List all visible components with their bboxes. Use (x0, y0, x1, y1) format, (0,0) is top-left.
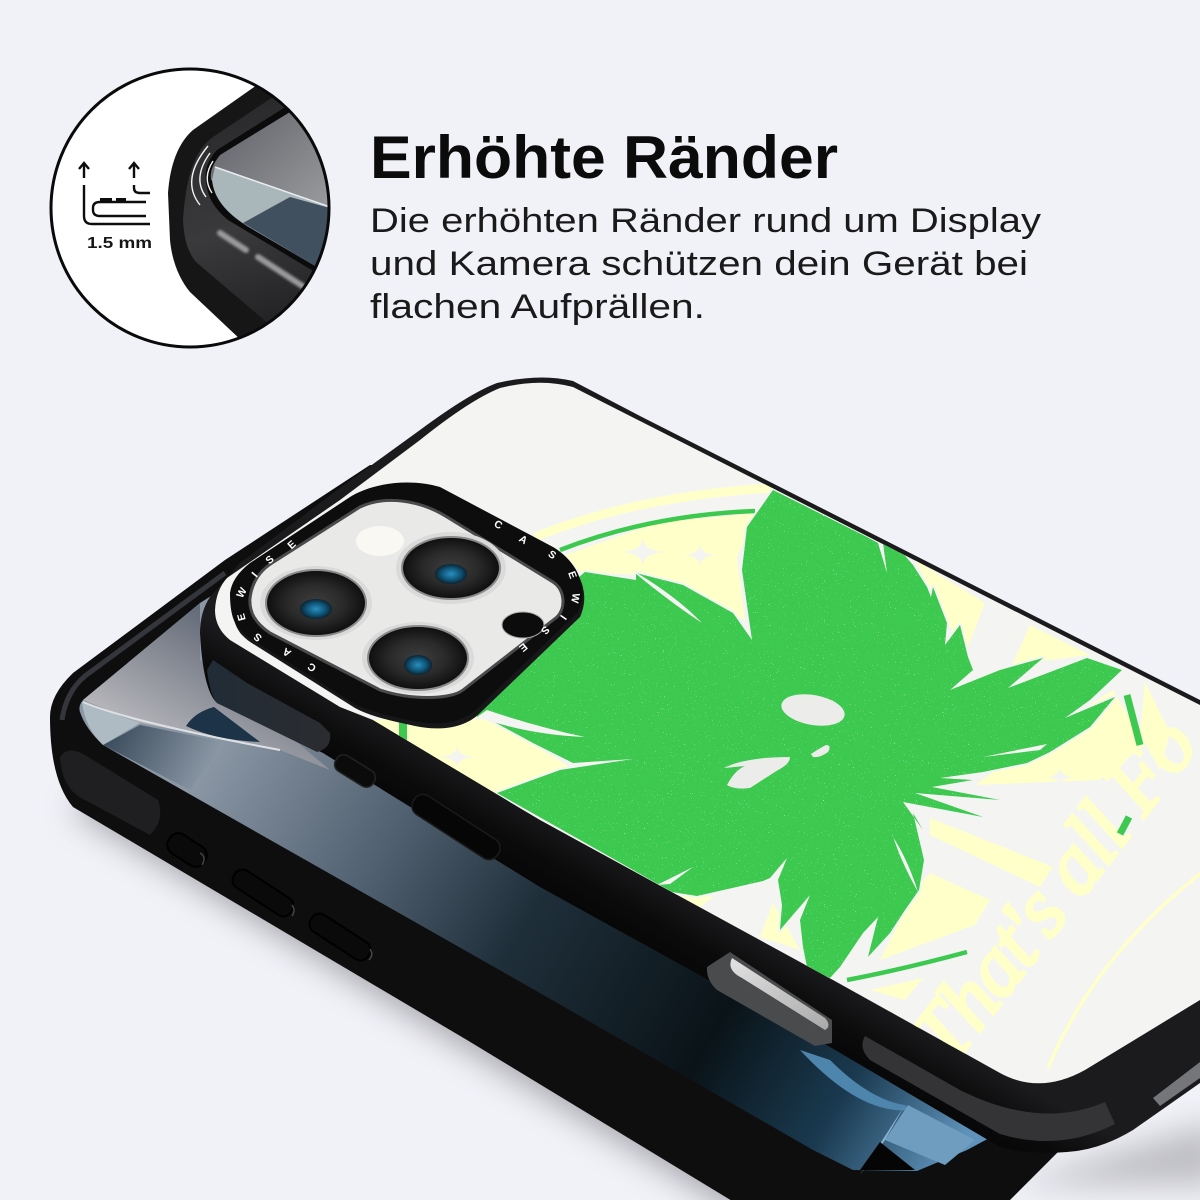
label: 1.5 mm: 1.5 mm (87, 235, 152, 252)
yellow outer arc (535, 488, 775, 537)
lower-right screen blue reflections (800, 1050, 910, 1110)
camera window (250, 500, 563, 698)
CASEWISE ring text: E (285, 538, 299, 552)
screen dark corner (103, 725, 225, 790)
CASEWISE ring text: I (249, 570, 261, 580)
CASEWISE ring text: E (565, 570, 579, 580)
icon: impact arcs (192, 146, 213, 205)
body text (370, 202, 1041, 326)
CASEWISE ring text: I (557, 612, 569, 622)
corner bumper panel (862, 1036, 1115, 1141)
lens 2 (396, 532, 506, 604)
lower phone side buttons (163, 829, 374, 964)
leaf slivers (477, 573, 1047, 892)
back print artwork (373, 488, 1200, 1082)
top phone: body band (200, 377, 1200, 1153)
CASEWISE ring text: A (517, 533, 530, 547)
hole (502, 612, 544, 638)
green ring segments (403, 511, 1140, 980)
camera ring (230, 482, 582, 723)
CASEWISE ring text: C (305, 660, 318, 674)
CASEWISE ring text: W (568, 592, 582, 604)
lower phone rim highlight (62, 573, 225, 720)
CASEWISE ring text: C (492, 518, 505, 532)
CASEWISE ring text: S (546, 548, 558, 562)
heading: Erhöhte Ränder (370, 124, 838, 191)
camera module (230, 482, 584, 728)
CASEWISE ring text (234, 518, 582, 674)
speaker grille (1153, 1062, 1200, 1106)
CASEWISE ring text: E (516, 640, 530, 654)
top phone: back surface (215, 383, 1200, 1083)
lower phone: bumper and screen (50, 465, 1060, 1200)
top phone shadow (1010, 1120, 1200, 1185)
body text: und Kamera schützen dein Gerät bei (370, 245, 1028, 283)
CASEWISE ring text: S (538, 623, 552, 637)
yellow fills (373, 513, 1170, 1000)
stars (437, 537, 1075, 788)
screen reflection pale (82, 702, 140, 745)
camera bump side panel (207, 660, 330, 752)
screen reflection top (83, 603, 330, 770)
CASEWISE ring text: S (251, 630, 265, 644)
CASEWISE ring text: A (280, 645, 293, 659)
lens 3 (362, 622, 474, 694)
yellow thin arc (1048, 870, 1200, 1068)
lens 1 (260, 566, 372, 640)
icon: 1.5 mm diagram (79, 163, 150, 224)
CASEWISE ring text: S (263, 553, 277, 567)
top phone buttons (332, 752, 504, 863)
face: eye (781, 694, 845, 726)
green palm leaf (477, 490, 1122, 978)
face: mouth (724, 757, 790, 789)
lower phone screen (79, 540, 1060, 1171)
screen dark notch (186, 707, 260, 742)
CASEWISE ring text: E (235, 612, 249, 622)
body text: flachen Aufprällen. (370, 288, 705, 326)
face: nose mark (811, 745, 830, 757)
CASEWISE ring text: W (234, 586, 250, 600)
charging port (707, 952, 832, 1046)
lower phone corner bumper (60, 750, 160, 835)
body text: Die erhöhten Ränder rund um Display (370, 202, 1041, 240)
flash (356, 526, 404, 556)
inset circle: raised edge detail (51, 69, 345, 347)
lower phone shadow (70, 760, 1000, 1200)
